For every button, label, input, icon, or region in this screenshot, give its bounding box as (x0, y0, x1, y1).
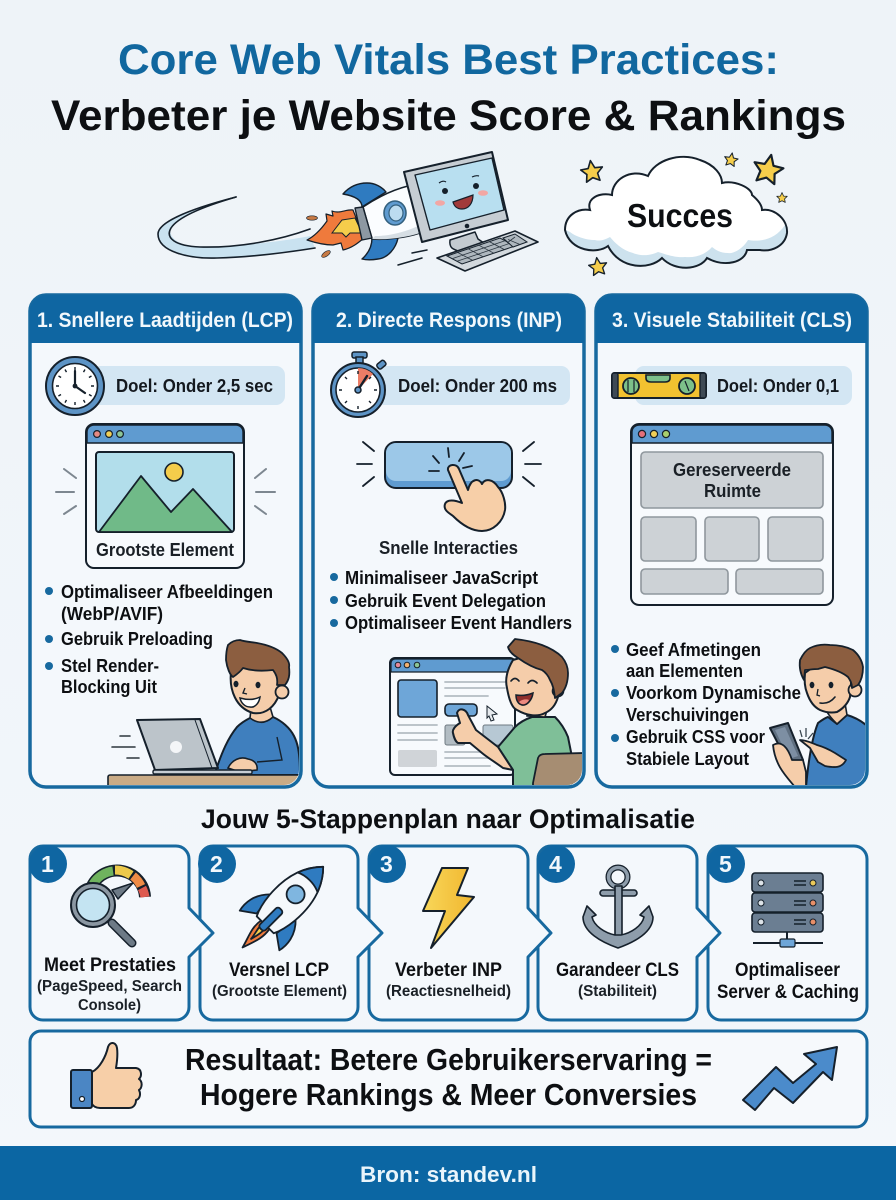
icon: clock (46, 357, 104, 415)
step 4 (537, 845, 720, 1020)
step label (212, 960, 347, 1000)
step label: (Reactiesnelheid) (386, 983, 511, 1000)
result banner (30, 1031, 867, 1127)
rocket flame (306, 210, 364, 259)
goal pill: Doel: Onder 200 ms (398, 376, 557, 396)
bullet list (611, 640, 801, 769)
panel header: 2. Directe Respons (INP) (336, 309, 562, 332)
stars (580, 152, 787, 276)
step label (386, 960, 511, 1000)
panel header (596, 295, 867, 343)
largest element browser window: Grootste Element (96, 540, 234, 560)
icon: spirit level (612, 373, 706, 398)
result text: Hogere Rankings & Meer Conversies (200, 1077, 697, 1112)
label: Snelle Interacties (379, 538, 518, 558)
step 1 (29, 845, 213, 1020)
title: Core Web Vitals Best Practices: (118, 36, 779, 84)
illustration: success cloud (555, 150, 795, 276)
bullet list: Stabiele Layout (626, 749, 749, 769)
bullet list: Blocking Uit (61, 677, 157, 697)
reserved space browser window: Gereserveerde (673, 460, 791, 480)
step label: Optimaliseer (735, 960, 841, 981)
step label: Garandeer CLS (556, 960, 679, 981)
cloud label: Succes (627, 197, 733, 234)
icon: hand pointer (445, 465, 505, 531)
speed lines (112, 736, 139, 758)
rocket porthole (384, 201, 406, 225)
step label (717, 960, 859, 1003)
goal pill (372, 366, 570, 405)
result text (185, 1042, 712, 1112)
panel header (313, 295, 584, 343)
step number (368, 845, 406, 883)
step label (37, 955, 182, 1014)
icon: growth arrow (743, 1047, 837, 1110)
goal pill (635, 366, 852, 405)
step label (556, 960, 679, 1000)
icon: anchor (583, 868, 653, 948)
bullet list: Gebruik CSS voor (626, 727, 765, 747)
rocket fins (343, 183, 386, 207)
panel: INP (313, 295, 584, 787)
step label: (PageSpeed, Search (37, 978, 182, 995)
bullet list: Minimaliseer JavaScript (345, 568, 538, 588)
step label: Versnel LCP (229, 960, 329, 981)
highlight rays (56, 469, 275, 514)
icon: rocket (222, 846, 344, 968)
step label: (Stabiliteit) (578, 983, 657, 1000)
step label: Verbeter INP (395, 960, 502, 981)
icon: stopwatch (331, 352, 387, 417)
reserved space browser window: Ruimte (704, 481, 761, 501)
step number: 2 (210, 851, 223, 877)
step 3 (368, 845, 551, 1020)
bullet list: Optimaliseer Afbeeldingen (61, 582, 273, 602)
bullet list: Voorkom Dynamische (626, 683, 801, 703)
goal pill: Doel: Onder 2,5 sec (116, 376, 273, 396)
step label: Console) (78, 997, 141, 1014)
footer: Bron: standev.nl (360, 1162, 537, 1187)
step label: Meet Prestaties (44, 955, 176, 976)
icon: lightning bolt (423, 868, 474, 948)
illustration: rocket with computer (158, 152, 538, 271)
section heading: Jouw 5-Stappenplan naar Optimalisatie (201, 804, 695, 834)
rocket swoosh trail (158, 197, 315, 258)
step 5 (707, 845, 867, 1020)
developer with laptop (108, 640, 303, 787)
title: Verbeter je Website Score & Rankings (51, 92, 846, 140)
rocket body (363, 186, 420, 239)
step number: 4 (549, 851, 562, 877)
panel header: 3. Visuele Stabiliteit (CLS) (612, 309, 852, 332)
bullet list: Geef Afmetingen (626, 640, 761, 660)
developer with phone (770, 645, 866, 787)
bullet list: (WebP/AVIF) (61, 604, 163, 624)
title (51, 36, 846, 140)
computer monitor (404, 152, 508, 251)
panel: CLS (596, 295, 867, 787)
bullet list: Verschuivingen (626, 705, 749, 725)
bullet list: Gebruik Preloading (61, 629, 213, 649)
panel header: 1. Snellere Laadtijden (LCP) (37, 309, 293, 332)
icon: server (752, 873, 823, 947)
bullet list: Optimaliseer Event Handlers (345, 613, 572, 633)
icon: magnifier with gauge (71, 870, 145, 943)
step 2 (198, 845, 382, 1020)
result text: Resultaat: Betere Gebruikerservaring = (185, 1042, 712, 1077)
footer (0, 1146, 896, 1200)
bullet list: Stel Render- (61, 656, 159, 676)
step number: 1 (41, 851, 54, 877)
click button (357, 442, 541, 488)
goal pill: Doel: Onder 0,1 (717, 376, 839, 396)
motion lines (398, 250, 427, 265)
step label: Server & Caching (717, 982, 859, 1003)
step number (29, 845, 67, 883)
keyboard (437, 231, 538, 271)
step number: 3 (380, 851, 393, 877)
step label: (Grootste Element) (212, 983, 347, 1000)
reserved space browser window (631, 424, 833, 605)
step number (537, 845, 575, 883)
largest element browser window (86, 424, 244, 568)
browser mockup (390, 658, 515, 775)
panel: LCP (30, 295, 303, 787)
step number (707, 845, 745, 883)
bullet list (330, 568, 572, 633)
step number (198, 845, 236, 883)
panel header (30, 295, 301, 343)
bullet list: aan Elementen (626, 661, 743, 681)
bullet list (45, 582, 273, 697)
step number: 5 (719, 851, 732, 877)
developer pointing (453, 639, 584, 787)
icon: thumbs up (71, 1043, 142, 1108)
goal pill (88, 366, 285, 405)
bullet list: Gebruik Event Delegation (345, 591, 546, 611)
